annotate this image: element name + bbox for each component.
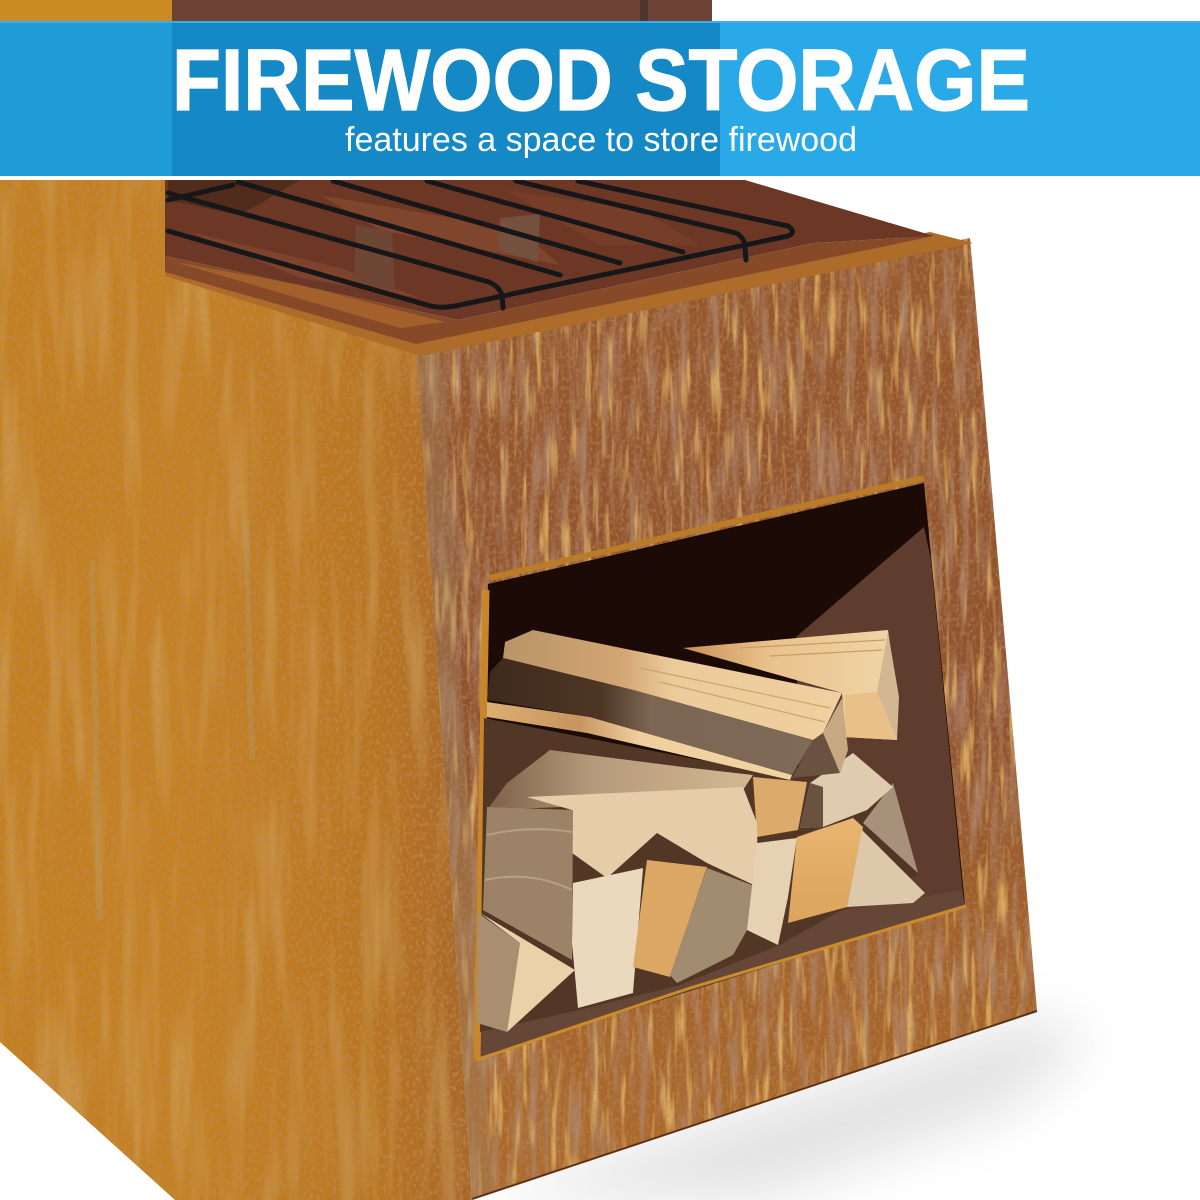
shadow patch <box>168 180 300 215</box>
log: bottom right <box>788 818 925 923</box>
upper chimney behind banner <box>0 0 712 22</box>
log: large split <box>527 787 758 887</box>
log: back right <box>683 630 899 740</box>
left jamb edge <box>477 590 486 1058</box>
floor <box>476 890 965 1058</box>
log: left end grain <box>483 807 573 960</box>
bottom edge highlight <box>476 906 966 1060</box>
white rule <box>0 176 745 180</box>
log: right middle <box>800 753 893 828</box>
log: far right <box>863 783 918 873</box>
rim highlight <box>175 262 445 328</box>
floor shadow <box>476 1015 1090 1200</box>
log: narrow center <box>747 838 797 945</box>
firewood logs <box>477 630 925 1032</box>
back well <box>165 180 934 320</box>
rim plate <box>165 236 934 344</box>
log: top long <box>487 630 848 780</box>
log stack shadow mass <box>480 718 918 1032</box>
log: center <box>633 860 757 983</box>
log: large rear slab <box>487 750 753 810</box>
log: middle wedge <box>753 777 807 837</box>
support bracket left <box>354 225 395 292</box>
outer lip <box>165 232 973 356</box>
firepit left face <box>0 176 480 1200</box>
log: bottom left <box>477 913 575 1032</box>
firepit right face <box>417 235 1042 1200</box>
front corner strip <box>417 348 494 1200</box>
storage opening <box>476 478 966 1060</box>
lit side wall <box>476 527 964 1050</box>
top edge highlight <box>489 478 924 578</box>
title: FIREWOOD STORAGE <box>172 32 1030 129</box>
support bracket right <box>498 214 540 262</box>
banner background <box>0 21 1200 180</box>
firebowl top and rim <box>165 180 973 356</box>
log: white split <box>572 868 643 1008</box>
well patches <box>190 232 420 298</box>
cooking grill <box>168 181 792 308</box>
subtitle: features a space to store firewood <box>345 121 857 159</box>
